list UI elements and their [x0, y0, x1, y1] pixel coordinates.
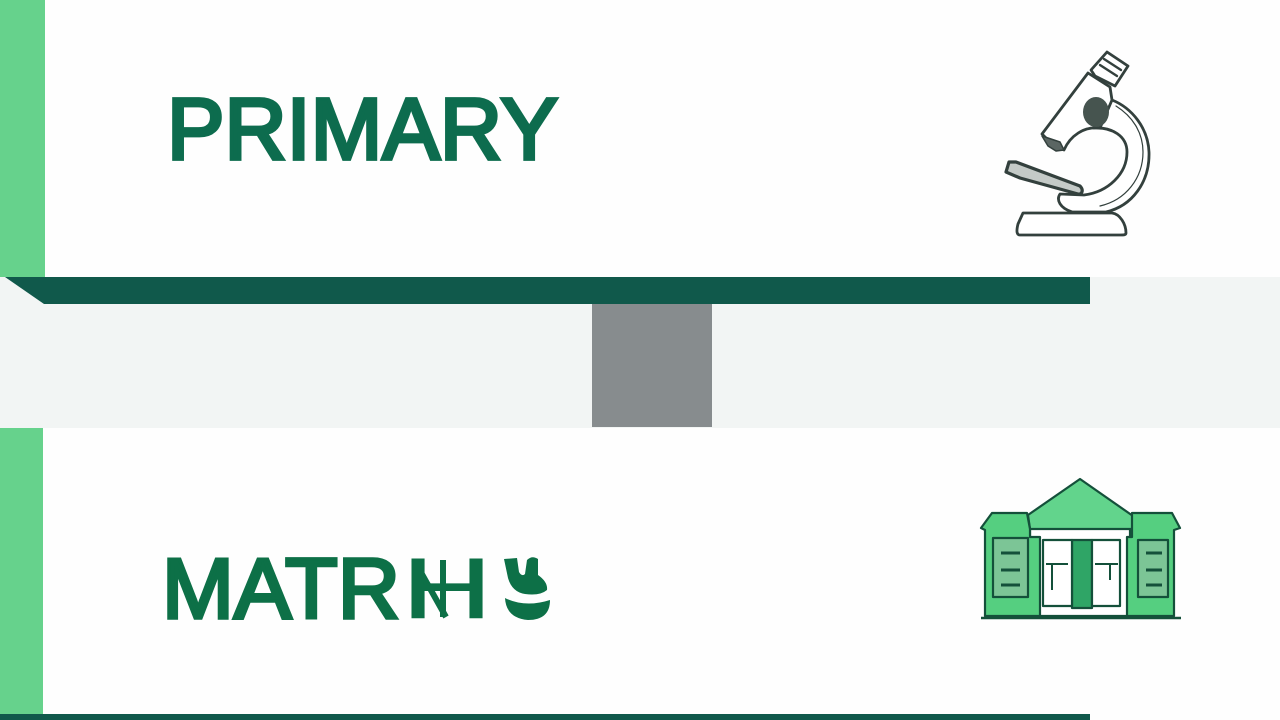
heading end glyph	[504, 557, 550, 620]
heading: primary: PRIMARY	[167, 81, 558, 178]
icon: microscope	[1006, 52, 1149, 235]
panel: matrix	[0, 428, 1181, 715]
heading: matrix: MATR	[162, 542, 400, 637]
icon: museum building	[981, 479, 1181, 618]
heading: garbled final letter: H	[402, 542, 492, 637]
matrix accent bar	[0, 428, 43, 715]
block: grey connector	[592, 304, 712, 427]
panel: primary	[0, 0, 1149, 277]
band: dark header bar	[5, 277, 1090, 304]
band: light separator	[0, 277, 1280, 428]
primary accent bar	[0, 0, 45, 277]
heading: garbled letter middle strokes	[414, 560, 446, 617]
band: bottom dark bar	[0, 714, 1090, 720]
